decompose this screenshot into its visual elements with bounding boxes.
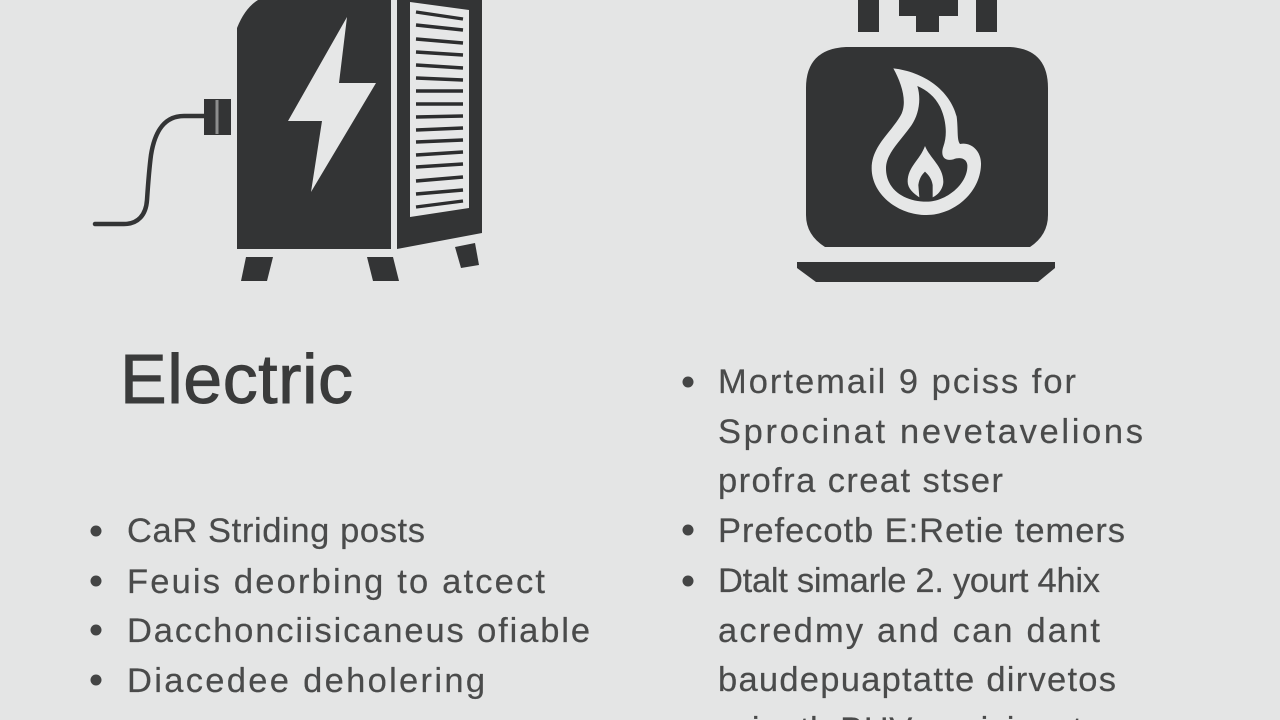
- gas bullet 3: Dtalt simarle 2. yourt 4hix: [718, 562, 1100, 600]
- icon: lightning bolt: [288, 17, 376, 192]
- heater side panel: [397, 0, 482, 249]
- gas bullet 1: Sprocinat nevetavelions: [718, 413, 1143, 451]
- bullet 4: Diacedee deholering: [127, 662, 485, 700]
- heater front body: [237, 0, 391, 249]
- heading: Electric: Electric: [120, 340, 353, 418]
- heater right foot: [455, 243, 479, 268]
- bullet 1: CaR Striding posts: [127, 512, 425, 550]
- bullet 3: Dacchonciisicaneus ofiable: [127, 612, 590, 650]
- bullet 2: Feuis deorbing to atcect: [127, 563, 545, 601]
- icon: electric heater: [95, 0, 482, 281]
- heater cord: [95, 116, 204, 224]
- heater left foot: [241, 257, 273, 281]
- gas bullet 1: [682, 363, 1143, 500]
- gas bullet 3: acredmy and can dant: [718, 612, 1100, 650]
- gas bullet 1: Mortemail 9 pciss for: [718, 363, 1076, 401]
- icon: gas heater: [797, 0, 1055, 282]
- right top connector: [976, 0, 997, 32]
- canister base: [797, 262, 1055, 282]
- gas bullet 1: profra creat stser: [718, 462, 1003, 500]
- left top connector: [858, 0, 879, 32]
- panel: electric bullet list: [90, 512, 590, 700]
- gas canister body: [806, 47, 1048, 247]
- panel: gas bullet list: [682, 363, 1143, 720]
- centre top connector: [899, 0, 958, 32]
- heater grille: [410, 2, 469, 217]
- heater plug: [204, 99, 231, 135]
- gas bullet 3: [682, 562, 1116, 720]
- icon: flame: [872, 68, 981, 215]
- gas bullet 2: Prefecotb E:Retie temers: [718, 512, 1125, 550]
- gas bullet 3: baudepuaptatte dirvetos: [718, 661, 1116, 699]
- heater middle foot: [367, 257, 399, 281]
